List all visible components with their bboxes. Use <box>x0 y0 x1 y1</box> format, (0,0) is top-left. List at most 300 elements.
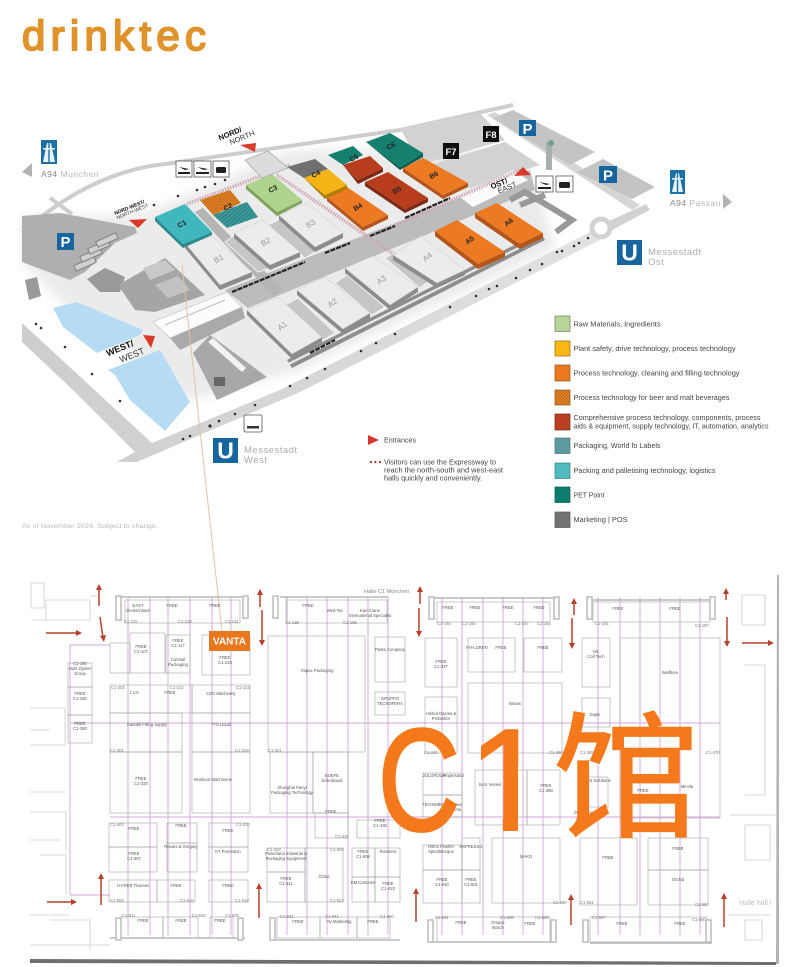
label: A94 Passau: A94 Passau <box>670 198 721 208</box>
hall B3 <box>279 203 343 252</box>
hall plan sheet <box>30 575 779 965</box>
entrance north: NORTH <box>228 129 256 147</box>
parking sign north-east: P <box>522 121 533 138</box>
label: Messestadt West: Messestadt <box>244 445 298 456</box>
entrance east: OST/ <box>489 176 510 191</box>
hall C1: C1 <box>177 219 188 230</box>
stand labels: Spindletorque <box>428 849 455 854</box>
stand labels: CDV Machinery <box>206 691 237 696</box>
sign: F7 <box>443 143 459 159</box>
north-south link <box>195 208 283 296</box>
stand labels: FREE <box>540 783 552 788</box>
stand labels: C1-540 <box>435 882 450 887</box>
stand labels: C1-347 <box>434 664 449 669</box>
stand labels: FREE <box>382 881 394 886</box>
stand labels: FREE <box>469 605 481 610</box>
metro sign west: U <box>217 438 234 464</box>
pink grid lines <box>70 597 720 935</box>
hall C5 <box>328 146 383 184</box>
legend item: PET point: PET Point <box>574 490 604 500</box>
stand labels: FREE <box>170 883 182 888</box>
hall A5 <box>435 220 505 269</box>
east entrance band <box>460 170 528 207</box>
stand codes: C1-503 <box>110 898 124 903</box>
legend: expressway note: halls quickly and conveniently. <box>384 474 482 482</box>
east parking areas <box>493 110 655 199</box>
stand labels <box>69 603 694 930</box>
hall A4 <box>393 236 465 288</box>
hall title: C1馆: 馆 <box>552 668 700 867</box>
hall B4 <box>327 187 388 231</box>
stand labels: Ravani & Gregory <box>164 844 199 849</box>
central road <box>225 170 535 308</box>
legend item: process technology: Process technology, cleaning and filling technology <box>574 368 740 378</box>
north perimeter road <box>22 105 513 233</box>
stand labels: Intsam <box>509 701 522 706</box>
stand codes: C1-155 <box>343 620 357 625</box>
stand codes: C1-523 <box>330 898 344 903</box>
label: Messestadt Ost: Messestadt <box>648 247 702 258</box>
transport icons east <box>536 176 573 192</box>
north-west slip road <box>22 198 72 218</box>
stand labels: C1-506 <box>356 854 371 859</box>
stand labels: MAKO <box>520 854 533 859</box>
stand labels: FREE <box>637 788 649 793</box>
hall A6: A6 <box>503 217 515 228</box>
legend: entrances: Entrances <box>384 436 416 444</box>
stand labels: H-FREE Tsunami <box>117 883 149 888</box>
stand codes: C1-658 <box>500 915 514 920</box>
stand labels: FREE <box>495 645 507 650</box>
stand labels: 1 1-5 <box>129 690 139 695</box>
VANTA stand marker: VANTA <box>213 636 246 648</box>
stand labels: FH-LOREN <box>466 645 488 650</box>
arrow: Munich <box>22 163 32 177</box>
west entrance building <box>153 292 245 350</box>
east courtyard block <box>510 192 572 232</box>
stand labels: Cantrall <box>171 657 185 662</box>
stand labels: Wellbore <box>662 670 679 675</box>
stand labels: Daple <box>590 712 601 717</box>
legend item: marketing: Marketing | POS <box>574 515 628 524</box>
legend item: packing and palletising: Packing and palletising technology, logistics <box>574 466 716 475</box>
expressway dots <box>187 165 520 262</box>
stand codes <box>110 619 720 922</box>
entrance north-west: NORD-WEST/ <box>114 199 146 217</box>
roundabout <box>592 204 650 237</box>
stand labels: TECHNIBEV <box>422 802 446 807</box>
building outlines right <box>110 595 775 943</box>
parking decks <box>74 233 118 271</box>
stand labels: FREE <box>74 721 86 726</box>
hall names: Halle hall I <box>739 900 772 907</box>
stand labels: C1-516 <box>636 793 651 798</box>
stand codes: C1-191 <box>595 621 609 626</box>
south-west road <box>22 232 600 462</box>
stand labels: FREE <box>222 828 234 833</box>
stand labels: Probiotics <box>432 716 450 721</box>
stand labels: FREE <box>166 603 178 608</box>
door pillars <box>116 596 715 942</box>
motorway sign east <box>670 170 685 194</box>
transport icons north <box>176 161 229 177</box>
stand labels: Ompac <box>491 920 505 925</box>
stand codes: C1-197 <box>695 623 709 628</box>
metro sign east: U <box>621 240 638 266</box>
parking sign east <box>599 166 617 184</box>
stand labels: Shanghai Panyi <box>277 785 307 790</box>
VANTA stand marker <box>209 631 250 651</box>
hall C5: C5 <box>349 153 360 164</box>
stand labels: C1-280 <box>73 696 88 701</box>
stand labels: N/L <box>593 649 600 654</box>
hall C6 <box>366 133 423 170</box>
stand codes: C1-660 <box>535 915 549 920</box>
hall B4: B4 <box>353 202 364 213</box>
south service band <box>287 232 545 368</box>
stand labels: BUEFE <box>325 773 339 778</box>
parking sign east: P <box>603 168 613 184</box>
stand labels: Bosch <box>492 925 504 930</box>
metro sign east <box>617 240 642 266</box>
hall C1 <box>155 204 212 248</box>
stand labels: FREE <box>602 855 614 860</box>
hall A2 <box>297 277 370 334</box>
site map <box>22 105 732 466</box>
stand codes: C1-145 <box>437 621 451 626</box>
west parking <box>22 213 137 280</box>
parking sign west <box>57 233 74 251</box>
hall A1 <box>247 297 322 359</box>
stand labels: Wed-Tec <box>327 608 343 613</box>
stand labels: FREE <box>325 809 337 814</box>
hall A5: A5 <box>464 235 476 246</box>
legend item: beer and malt <box>555 390 730 405</box>
stand labels: EXPRESSO <box>459 844 483 849</box>
stand codes: C1-370 <box>706 750 720 755</box>
stand labels: FREE <box>612 606 624 611</box>
hall C3 <box>246 174 302 216</box>
stand codes: C1-560 <box>553 900 567 905</box>
stand labels: FREE <box>435 659 447 664</box>
stand labels: FREE <box>172 638 184 643</box>
logo: drinktec: drinktec <box>22 12 206 59</box>
stand codes: C1-115 <box>124 619 138 624</box>
stand labels: FREE <box>128 851 140 856</box>
stand codes: C1-561 <box>580 900 594 905</box>
stand codes: C1-341 <box>424 750 438 755</box>
stand labels: C1-380 <box>539 788 554 793</box>
stand labels: FREE <box>219 655 231 660</box>
stand labels: Munkour Machinerie <box>194 777 233 782</box>
stand labels: DCN Solutions <box>583 778 611 783</box>
stand codes: C1-616 <box>192 913 206 918</box>
hall A2: A2 <box>326 296 340 310</box>
legend: entrances <box>368 435 416 445</box>
stand labels: Ritmo Flusher <box>428 844 455 849</box>
stand codes: C1-403 <box>110 822 124 827</box>
hall B2 <box>234 220 300 270</box>
stand labels: Packaging Technology <box>271 790 314 795</box>
east tower <box>546 140 554 170</box>
hall names <box>364 589 772 907</box>
leader line to hall plan <box>182 265 222 632</box>
stand labels: EAST <box>133 603 144 608</box>
hall C4: C4 <box>311 169 322 180</box>
north hall building <box>245 151 288 178</box>
hall title: C1馆: 1 <box>468 699 549 861</box>
stand codes: C1-360 <box>549 750 563 755</box>
stand labels: FREE <box>455 920 467 925</box>
legend item: PET point <box>555 487 604 502</box>
stand codes: C1-680 <box>692 917 706 922</box>
hall title: C1馆 <box>382 710 692 838</box>
stand codes: C1-202 <box>111 685 125 690</box>
hall title: C1馆: C <box>378 698 460 861</box>
stand labels: C1-180 <box>73 661 88 666</box>
ground area <box>22 150 555 400</box>
west lake north <box>53 302 143 353</box>
stand labels: C1-423 <box>381 886 396 891</box>
stand labels: JOLGROUP <box>422 773 446 778</box>
hall A6 <box>475 203 543 249</box>
stand labels: C1-380 <box>73 726 88 731</box>
parking sign west: P <box>60 234 71 251</box>
sign: F8 <box>483 126 499 142</box>
east road <box>487 112 640 210</box>
stand codes: C1-567 <box>695 902 709 907</box>
stand codes: C1-167 <box>515 621 529 626</box>
stand labels: China <box>319 874 330 879</box>
stand labels: FREE <box>292 919 304 924</box>
stand labels: FREE <box>524 921 536 926</box>
hall B1 <box>185 237 252 290</box>
stand labels: FREE <box>616 921 628 926</box>
motorway sign west <box>41 140 57 164</box>
entrance north-west: NORTH-WEST <box>116 203 149 221</box>
sheet shadow <box>30 575 779 965</box>
hall A4: A4 <box>421 250 435 264</box>
hall B5 <box>365 172 428 213</box>
stand labels: FREE <box>533 605 545 610</box>
entrance west: WEST/ <box>105 338 135 358</box>
entrance north <box>217 125 256 152</box>
hall C3: C3 <box>268 184 279 195</box>
entrance west: WEST <box>118 346 146 365</box>
stand codes: C1-181 <box>537 621 551 626</box>
stand labels: FREE <box>280 876 292 881</box>
stand labels: FREE <box>128 826 140 831</box>
legend item: packing and palletising <box>555 463 716 478</box>
note: date stamp: As of November 2024. Subject to change. <box>22 523 158 530</box>
legend item: packaging: Packaging, World fo Labels <box>574 441 661 450</box>
stand labels: FREE <box>442 605 454 610</box>
stand labels: Packaging Equipment <box>266 856 307 861</box>
entrance north: NORD/ <box>217 125 244 142</box>
legend item: process technology <box>555 365 740 381</box>
stand labels: FREE <box>367 919 379 924</box>
stand labels: FREE <box>135 644 147 649</box>
stand labels: Kandall Filling Supply <box>127 722 168 727</box>
building outlines left <box>30 583 286 950</box>
stand labels: FREE <box>302 603 314 608</box>
stand codes: C1-625 <box>225 913 239 918</box>
west lake south <box>108 350 190 431</box>
parking sign north-east <box>519 120 536 138</box>
label: Messestadt West: West <box>244 455 267 466</box>
hall B6: B6 <box>429 170 440 181</box>
sign: F7: F7 <box>445 147 457 158</box>
stand labels: KT Promotion <box>215 849 241 854</box>
stand codes: C1-321 <box>268 748 282 753</box>
stand codes: C1-667 <box>592 915 606 920</box>
stand labels: FREE <box>502 605 514 610</box>
stand labels: KM Cartoons <box>351 880 375 885</box>
stand codes: C1-301 <box>110 748 124 753</box>
stand labels: C1-107 <box>134 649 149 654</box>
stand labels: FREE <box>74 691 86 696</box>
stand codes: C1-133 <box>178 619 192 624</box>
stand codes: C1-212 <box>170 685 184 690</box>
stand labels: BAS Vessel <box>479 782 501 787</box>
legend: exhibition categories <box>555 316 769 528</box>
sign: F8: F8 <box>485 130 497 141</box>
arrow: Passau <box>723 194 732 209</box>
stand labels: TECNOFERA <box>377 701 403 706</box>
stand labels: C1-320 <box>134 781 149 786</box>
hall B3: B3 <box>304 217 318 230</box>
hall names: Halle C1 München <box>364 589 409 595</box>
legend item: raw materials: Raw Materials, Ingredients <box>574 320 661 328</box>
stand labels: C1-601 <box>464 882 479 887</box>
stand labels: United Dairies & <box>426 711 456 716</box>
stand labels: FREE <box>175 823 187 828</box>
stand labels: TTS Liquid <box>211 722 232 727</box>
stand labels: FREE <box>374 818 386 823</box>
stand labels: FREE <box>672 846 684 851</box>
stand labels: International Specialist <box>349 613 392 618</box>
stand labels: FREE <box>164 690 176 695</box>
stand labels: Kickoboard <box>322 778 343 783</box>
stand labels: GRUPPO <box>381 696 400 701</box>
flow arrows <box>46 584 774 927</box>
entrance east <box>489 167 531 196</box>
stand codes: C1-423 <box>267 847 281 852</box>
stand labels: C1-219 <box>218 660 233 665</box>
stand codes: C1-365 <box>580 750 594 755</box>
entrance north-west <box>114 199 149 228</box>
hall windows <box>232 198 450 353</box>
legend: expressway note: reach the north-south and west-east <box>384 466 503 474</box>
stand labels: Pasta Company <box>375 647 406 652</box>
stand labels: Ospac Packaging <box>301 668 334 673</box>
stand labels: FREE <box>209 603 221 608</box>
stand codes: C1-420 <box>236 822 250 827</box>
metro sign west <box>213 438 238 464</box>
legend item: comprehensive process technology <box>555 413 769 430</box>
hall C4 <box>287 159 347 199</box>
stand labels: Deutschland <box>126 608 150 613</box>
hall B1: B1 <box>212 252 226 265</box>
entrance west <box>105 335 155 365</box>
label: A94 Munchen: A94 Munchen <box>41 169 99 179</box>
stand codes: C1-641 <box>325 914 339 919</box>
legend item: raw materials <box>555 316 661 332</box>
stand labels: FREE <box>436 877 448 882</box>
hall C6: C6 <box>386 141 397 152</box>
stand codes: C1-611 <box>122 913 136 918</box>
stand labels: Roosters <box>380 849 396 854</box>
stand labels: Coil Tech <box>587 654 605 659</box>
stand codes: C1-403 <box>330 847 344 852</box>
hall B2: B2 <box>259 235 273 248</box>
stand codes: C1-510 <box>180 898 194 903</box>
hall A3: A3 <box>375 273 389 287</box>
stand labels: Tirrentine <box>444 802 462 807</box>
legend item: comprehensive process technology: Comprehensive process technology, components, process <box>574 413 761 422</box>
stand labels: Ampersand <box>442 773 464 778</box>
central complex <box>118 258 205 312</box>
stand labels: OLAM Packaging <box>574 810 607 815</box>
stand codes: C1-222 <box>236 685 250 690</box>
legend item: plant safety: Plant safety, drive technology, process technology <box>574 344 736 353</box>
stand labels: Powerland Industrial & <box>265 851 307 856</box>
legend item: comprehensive process technology: aids & equipment, supply technology, IT, automation, analytics <box>574 422 769 430</box>
courtyards <box>225 219 430 340</box>
stand codes: C1-518 <box>235 898 249 903</box>
hall B5: B5 <box>392 185 403 196</box>
stand codes: C1-141 <box>225 619 239 624</box>
hall C2 <box>200 190 258 228</box>
stand labels: FREE <box>214 918 226 923</box>
legend item: packaging <box>555 438 661 454</box>
F area lots <box>400 113 540 188</box>
legend item: plant safety <box>555 341 736 356</box>
stand codes: C1-125 <box>285 620 299 625</box>
small west buildings <box>25 268 125 300</box>
stand labels: Minola <box>681 784 694 789</box>
legend: expressway note <box>370 458 503 482</box>
stand labels: Hold Zipster <box>69 666 92 671</box>
subway icon west <box>244 415 262 432</box>
stand labels: Packaging <box>168 662 188 667</box>
south-west building <box>193 335 267 400</box>
stand codes: C1-650 <box>380 914 394 919</box>
stand labels: Group <box>74 671 86 676</box>
hall A1: A1 <box>276 319 290 333</box>
stand codes: C1-631 <box>280 914 294 919</box>
stand labels: FREE <box>357 849 369 854</box>
stand outlines <box>68 600 720 942</box>
stand labels: Orchid <box>672 877 685 882</box>
stand codes: C1-433 <box>335 834 349 839</box>
legend: expressway note: Visitors can use the Expressway to <box>384 458 496 466</box>
hall A3 <box>345 256 418 310</box>
stand labels: C1-435 <box>373 823 388 828</box>
stand labels: C1-511 <box>279 881 293 886</box>
stand codes: C1-165 <box>462 621 476 626</box>
stand labels: Systems <box>445 807 461 812</box>
stand labels: FREE <box>135 776 147 781</box>
stand labels: FREE <box>674 921 686 926</box>
stand labels: FREE <box>222 883 234 888</box>
stand labels: AV Marketing <box>327 919 352 924</box>
stand labels: FREE <box>465 877 477 882</box>
hall B6 <box>403 158 468 199</box>
stand labels: FREE <box>175 918 187 923</box>
stand labels: FREE <box>137 918 149 923</box>
stand codes: C1-318 <box>235 748 249 753</box>
